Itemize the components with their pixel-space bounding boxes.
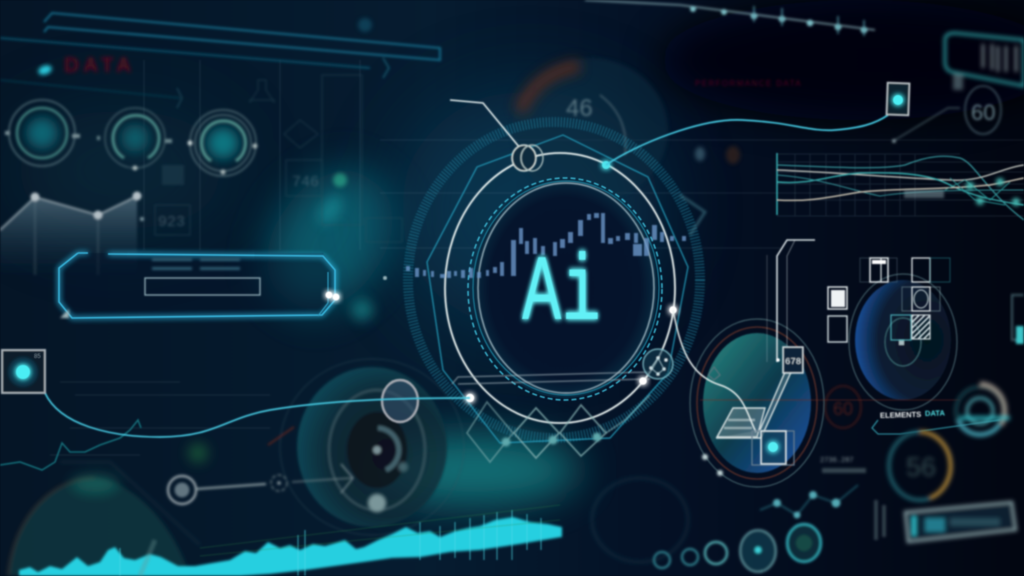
label box 678: 678 — [785, 357, 801, 367]
gauge 56 — [889, 432, 951, 500]
diamond wave — [467, 395, 650, 462]
polygon frame — [427, 135, 688, 443]
icon: laptop target box — [752, 431, 794, 465]
small ring on lens — [382, 380, 418, 422]
gauge 3 — [188, 110, 258, 176]
panel: hexagonal status bar — [59, 253, 340, 318]
icon: glowing indicator — [37, 63, 53, 77]
number 46: 46 — [566, 95, 593, 122]
diamond line nodes — [502, 432, 602, 446]
faint data text: 2736.287 — [820, 457, 854, 465]
inner dark core — [473, 178, 657, 398]
teal tag top right — [945, 33, 1024, 90]
neural ball — [643, 349, 673, 379]
faint panel blocks — [155, 75, 402, 242]
ring core — [796, 535, 812, 551]
fine ring — [473, 181, 659, 395]
top-left bracket lines — [0, 13, 440, 108]
red gauge 60 — [825, 386, 861, 428]
background grid lines — [50, 60, 1024, 455]
label: ELEMENTS DATA: DATA — [925, 408, 946, 418]
node connector with arrow — [168, 464, 353, 504]
faint hex ring left of graph — [680, 195, 705, 235]
network dots — [760, 485, 858, 518]
large faint bottom lens — [592, 478, 688, 562]
label: ELEMENTS DATA — [872, 408, 1000, 434]
white dots near disc — [702, 454, 723, 476]
ring icon — [740, 530, 776, 572]
ring icon — [682, 549, 698, 565]
faint vertical bars — [874, 500, 886, 540]
icon: person outline — [250, 80, 274, 102]
cyan connector: left node to ring — [45, 393, 470, 437]
graph node glows — [966, 178, 1020, 206]
area chart — [0, 192, 144, 275]
red gauge 60: 60 — [833, 399, 853, 419]
red small text top right: PERFORMANCE DATA — [695, 79, 802, 88]
L-shaped leader — [767, 240, 815, 362]
waveform — [19, 505, 562, 576]
gauge 2 — [97, 108, 172, 170]
label box 678 — [783, 347, 803, 373]
dashed ring — [468, 178, 662, 400]
glow spot — [383, 276, 387, 280]
bottom ring icons — [654, 524, 821, 572]
horizontal frame lines — [452, 372, 650, 384]
ring core — [754, 546, 762, 554]
dotted strip top right — [585, 0, 875, 36]
icon: top-right target box — [886, 83, 910, 115]
small teal line chart — [0, 420, 141, 470]
bottom-left dome — [8, 462, 200, 576]
white connector: ring to laptop — [673, 310, 756, 432]
linked rings — [512, 145, 543, 171]
ring nodes — [602, 161, 610, 169]
cyan connector: ring to top-right node — [606, 115, 888, 165]
graph label block — [904, 190, 944, 198]
icon: left target box — [2, 350, 45, 393]
blue disc — [849, 274, 957, 410]
lens dial — [268, 359, 464, 535]
icon: laptop — [716, 370, 792, 438]
label: red data text: DATA — [64, 54, 135, 77]
icon: left target box: 85 — [34, 354, 41, 360]
faint number 746: 746 — [292, 174, 319, 191]
faint dots left of graph — [695, 146, 740, 164]
laptop disc — [690, 319, 960, 487]
gauge 60 — [892, 86, 1001, 143]
orange disc behind number 46 — [512, 58, 668, 202]
faint number 923: 923 — [158, 214, 185, 231]
candlestick chart — [406, 213, 686, 278]
outer ticked ring — [408, 122, 700, 438]
teal capsule box — [905, 502, 1016, 542]
Ai title: Ai — [522, 241, 601, 348]
gauge 56: 56 — [906, 452, 936, 482]
icon tile grid — [828, 258, 950, 342]
gauge 1 — [5, 100, 80, 166]
gauge 60: 60 — [971, 100, 995, 125]
inner white ring — [478, 183, 654, 393]
main white ring — [445, 153, 675, 423]
ring icon — [654, 552, 670, 568]
faint data text — [820, 457, 866, 473]
line graph top right — [777, 153, 1024, 220]
ring icon — [705, 542, 727, 564]
central AI reticle — [406, 100, 700, 443]
label: ELEMENTS DATA: ELEMENTS — [880, 410, 921, 420]
ring icon — [787, 524, 821, 562]
gauge row — [5, 100, 258, 176]
right edge bright tag — [1012, 295, 1024, 344]
callout leader — [450, 100, 520, 148]
gauge upper right — [956, 384, 1010, 435]
